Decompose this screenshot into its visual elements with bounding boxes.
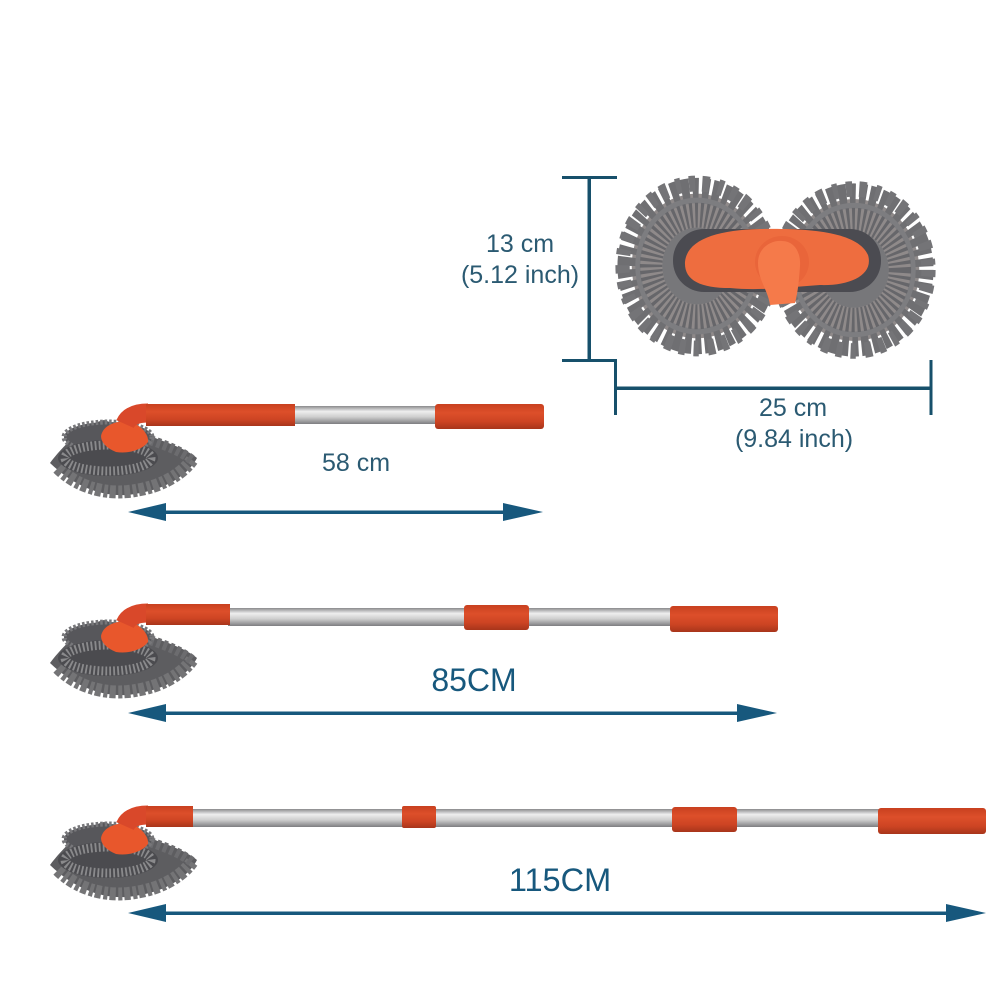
label: 115CM: 115CM — [509, 862, 611, 898]
label: width: 25 cm — [759, 394, 827, 422]
mop head — [50, 613, 197, 695]
handle: 85 cm — [50, 604, 778, 695]
collar grip — [146, 604, 230, 625]
bracket: neck — [758, 241, 800, 305]
tube — [294, 406, 436, 424]
label: height: 13 cm — [486, 230, 554, 258]
dimension: width bracket — [614, 360, 932, 415]
mop head — [50, 815, 197, 897]
handle: 115 cm — [50, 806, 986, 897]
collar grip — [146, 806, 193, 827]
arrow: 58 cm — [128, 503, 543, 521]
dimension: height bracket — [562, 176, 617, 362]
tube — [192, 809, 880, 827]
tube — [228, 608, 670, 626]
mop head — [50, 413, 197, 495]
collar grips — [146, 404, 295, 426]
bracket: socket shadow — [755, 236, 809, 288]
label: height: (5.12 inch) — [461, 261, 579, 289]
arrow: 115 cm — [128, 904, 986, 922]
end grip — [435, 404, 544, 429]
end grip — [670, 606, 778, 632]
disc: right fringe — [780, 189, 928, 351]
label: width — [735, 394, 853, 453]
end grip — [878, 808, 986, 834]
second joint grip — [672, 807, 737, 832]
middle grip — [464, 605, 529, 630]
handle: 58 cm — [50, 404, 544, 495]
bracket: dark underlay — [673, 229, 881, 292]
label: width: (9.84 inch) — [735, 425, 853, 453]
disc: left fringe — [623, 184, 771, 348]
label: 58 cm: 58 cm — [322, 449, 390, 477]
mop head: top view — [623, 184, 928, 351]
arrow: 85 cm — [128, 704, 777, 722]
label: 85CM: 85CM — [431, 662, 517, 698]
label: height — [461, 230, 579, 289]
first joint grip — [402, 806, 436, 828]
bracket: orange oval — [685, 229, 869, 289]
